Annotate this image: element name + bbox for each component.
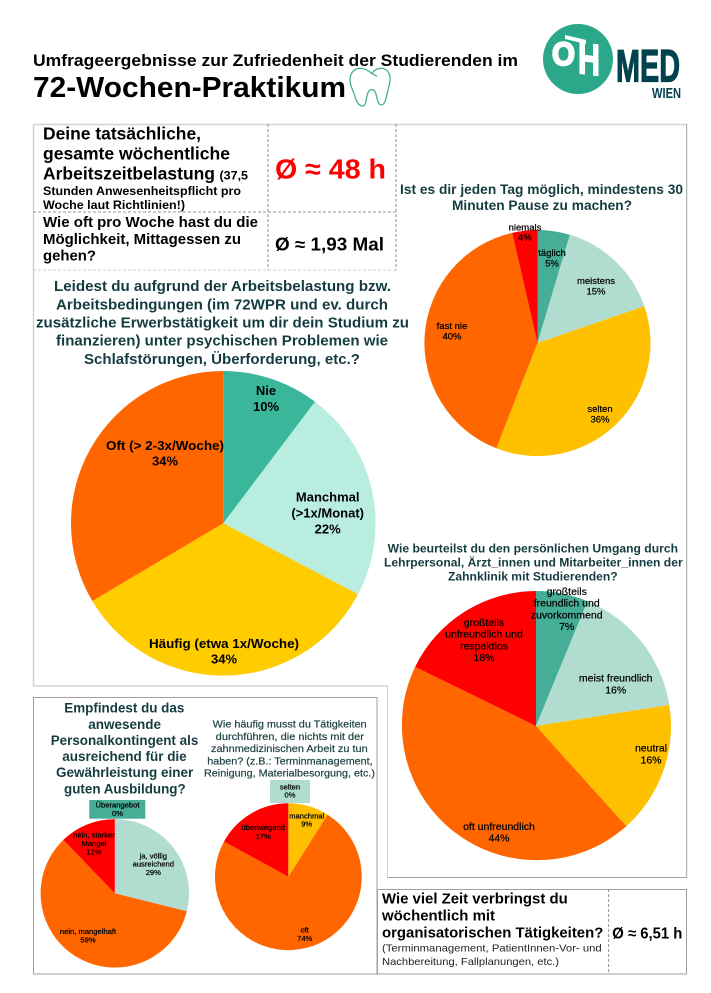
heading: staffing question: Empfindest du das	[64, 701, 184, 716]
pie chart: personal treatment: 18%	[473, 652, 495, 664]
pie chart: non-dental tasks: 74%	[297, 934, 313, 943]
logo: OH MED Wien: H	[578, 34, 600, 86]
heading: psychological problems question: Schlafstörungen, Überforderung, etc.?	[84, 351, 360, 368]
heading: staffing question: ausreichend für die	[62, 749, 187, 764]
heading: personal treatment question	[384, 542, 683, 584]
pie chart: staffing: 12%	[86, 847, 102, 856]
lunch question: Wie oft pro Woche hast du die	[43, 214, 258, 231]
heading: psychological problems question: Leidest du aufgrund der Arbeitsbelastung bzw.	[54, 279, 391, 295]
callout: rarely 0%	[270, 780, 310, 803]
pie chart: psychological problems: 34%	[152, 454, 178, 469]
working hours question: Arbeitszeitbelastung	[43, 164, 215, 184]
pie chart: psychological problems: Oft (> 2-3x/Woche)	[106, 438, 224, 453]
pie chart: non-dental tasks: 9%	[301, 820, 312, 829]
organisational tasks question: wöchentlich mit	[381, 908, 495, 925]
logo: OH MED Wien: WIEN	[652, 85, 681, 102]
pie chart: staffing: 59%	[80, 935, 96, 944]
heading: break question: Minuten Pause zu machen?	[452, 198, 632, 213]
title: 72-Wochen-Praktikum	[33, 72, 346, 104]
pie chart: staffing: 29%	[146, 868, 161, 877]
working hours question: (37,5	[220, 168, 248, 182]
pie chart: break	[424, 222, 650, 456]
logo: OH MED Wien	[543, 24, 681, 102]
pie chart: staffing: Mangel	[82, 839, 107, 848]
heading: break question	[400, 182, 683, 213]
lunch value: Ø ≈ 1,93 Mal	[275, 234, 384, 254]
pie chart: psychological problems: Häufig (etwa 1x/Woche)	[149, 636, 299, 651]
lunch question: gehen?	[43, 248, 96, 264]
pie chart: break: fast nie	[437, 321, 467, 332]
working hours question: Stunden Anwesenheitspflicht pro	[43, 184, 241, 198]
pie chart: break: 36%	[590, 415, 610, 426]
pie chart: personal treatment: 7%	[559, 621, 574, 633]
heading: non-dental tasks question: zahnmedizinischen Arbeit zu tun	[211, 743, 368, 755]
organisational tasks value: Ø ≈ 6,51 h	[612, 925, 682, 942]
heading: staffing question: Gewährleistung einer	[56, 765, 194, 780]
pie chart: staffing: ja, völlig	[139, 851, 167, 860]
pie chart: personal treatment: zuvorkommend	[531, 609, 603, 621]
organisational tasks question: Wie viel Zeit verbringst du	[382, 890, 568, 907]
organisational tasks question: organisatorischen Tätigkeiten?	[382, 925, 603, 942]
pie chart: psychological problems: (>1x/Monat)	[291, 505, 364, 520]
pie chart: personal treatment: neutral	[635, 743, 667, 755]
callout: rarely 0%: 0%	[285, 791, 296, 800]
pie chart: non-dental tasks	[215, 780, 362, 950]
callout: oversupply 0%: Überangebot	[96, 800, 140, 810]
pie chart: non-dental tasks: oft	[300, 925, 310, 934]
pie chart: personal treatment: meist freundlich	[579, 673, 653, 685]
pie chart: psychological problems: 22%	[315, 521, 341, 536]
heading: non-dental tasks question: Wie häufig musst du Tätigkeiten	[213, 719, 367, 731]
heading: staffing question: anwesende	[88, 717, 161, 732]
pie chart: non-dental tasks: 17%	[256, 832, 271, 841]
pie chart: break: niemals	[509, 222, 542, 234]
pie chart: staffing: nein, starker	[73, 831, 115, 840]
panel: weekly working hours and lunch table	[33, 124, 396, 270]
pie chart: personal treatment: großteils	[547, 586, 587, 598]
logo: OH MED Wien: O	[552, 36, 575, 72]
pie chart: personal treatment: großteils	[464, 617, 504, 629]
heading: staffing question	[51, 701, 198, 796]
heading: psychological problems question	[36, 279, 409, 368]
pie chart: psychological problems: Nie	[256, 383, 276, 398]
heading: psychological problems question: finanzieren) unter psychischen Problemen wie	[56, 334, 388, 350]
pie chart: break: 40%	[442, 332, 462, 342]
pie chart: break: selten	[587, 404, 613, 415]
callout: oversupply 0%	[89, 800, 145, 819]
working hours question: gesamte wöchentliche	[43, 144, 230, 164]
pie chart: break: 15%	[586, 287, 606, 298]
pie chart: personal treatment: oft unfreundlich	[463, 821, 535, 833]
pie chart: break: meistens	[577, 276, 615, 287]
callout: rarely 0%: selten	[280, 782, 300, 791]
pie chart: staffing: ausreichend	[133, 860, 174, 869]
pie chart: personal treatment: 44%	[488, 833, 510, 845]
heading: personal treatment question: Wie beurteilst du den persönlichen Umgang durch	[388, 542, 678, 556]
pie chart: non-dental tasks: manchmal	[289, 811, 325, 820]
heading: break question: Ist es dir jeden Tag möglich, mindestens 30	[400, 182, 683, 197]
callout: oversupply 0%: 0%	[112, 809, 123, 818]
panel frames	[33, 124, 687, 878]
heading: personal treatment question: Zahnklinik mit Studierenden?	[448, 570, 618, 584]
heading: non-dental tasks question	[204, 719, 375, 780]
icon: tooth	[350, 68, 390, 106]
lunch question	[43, 214, 258, 264]
panel: staffing and non-dental tasks	[34, 698, 377, 974]
pie chart: psychological problems: 34%	[211, 651, 237, 666]
pie chart: break: 5%	[545, 259, 559, 270]
heading: non-dental tasks question: haben? (z.B.: Terminmanagement,	[207, 755, 373, 767]
pie chart: staffing: nein, mangelhaft	[60, 927, 117, 936]
pie chart: personal treatment: 16%	[640, 754, 662, 766]
organisational tasks question	[381, 890, 603, 968]
heading: non-dental tasks question: durchführen, die nichts mit der	[216, 731, 365, 743]
pie chart: personal treatment	[402, 586, 671, 860]
working hours question: Woche laut Richtlinien!)	[43, 198, 185, 212]
pie chart: break: täglich	[538, 248, 566, 259]
pie chart: non-dental tasks: überwiegend	[242, 823, 285, 832]
working hours question	[43, 124, 248, 212]
pie chart: psychological problems: 10%	[253, 399, 279, 414]
pie chart: personal treatment: 16%	[605, 684, 626, 696]
heading: non-dental tasks question: Reinigung, Materialbesorgung, etc.)	[204, 768, 375, 780]
title	[33, 51, 518, 104]
pie chart: personal treatment: respektlos	[460, 640, 508, 652]
title: Umfrageergebnisse zur Zufriedenheit der Studierenden im	[33, 51, 518, 70]
working hours value: Ø ≈ 48 h	[275, 154, 386, 184]
pie chart: psychological problems	[71, 371, 376, 676]
organisational tasks question: (Terminmanagement, PatientInnen-Vor- und	[382, 943, 602, 955]
pie chart: personal treatment: freundlich und	[534, 598, 600, 610]
pie chart: break: 4%	[518, 233, 532, 244]
pie chart: psychological problems: Manchmal	[296, 490, 359, 505]
pie chart: staffing	[41, 800, 189, 968]
heading: personal treatment question: Lehrpersonal, Ärzt_innen und Mitarbeiter_innen der	[384, 555, 683, 570]
heading: staffing question: Personalkontingent als	[51, 733, 198, 748]
heading: staffing question: guten Ausbildung?	[64, 781, 186, 796]
heading: psychological problems question: zusätzliche Erwerbstätigkeit um dir dein Studium zu	[36, 315, 409, 331]
heading: psychological problems question: Arbeitsbedingungen (im 72WPR und ev. durch	[56, 297, 388, 313]
lunch question: Möglichkeit, Mittagessen zu	[43, 231, 241, 248]
pie chart: personal treatment: unfreundlich und	[445, 628, 523, 640]
organisational tasks question: Nachbereitung, Fallplanungen, etc.)	[382, 956, 559, 968]
panel: organisational tasks	[378, 889, 686, 974]
working hours question: Deine tatsächliche,	[43, 124, 201, 144]
